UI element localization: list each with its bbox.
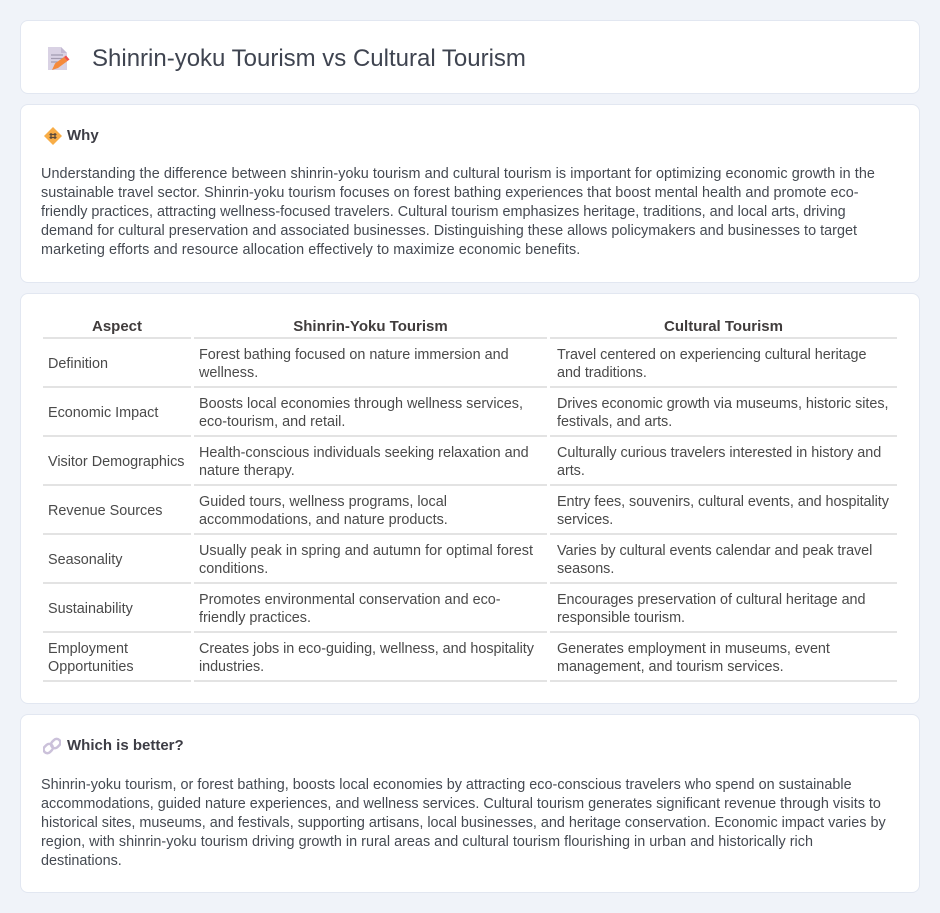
cell: shinrin-yoku sustainability [199,592,501,626]
table header: aspect: Aspect [92,318,142,335]
cell: cultural seasonality [557,543,872,577]
text: why paragraph: Understanding the difference between shinrin-yoku tourism and cultural tourism is important for optimizing economic growth in the [41,166,875,182]
text: which is better paragraph: Shinrin-yoku tourism, or forest bathing, boosts local economies by attracting eco-conscious travelers who spend on sustainable [41,777,852,793]
table header: cultural tourism [550,317,897,339]
table header: aspect [43,317,191,339]
table header: shinrin-yoku tourism: Shinrin-Yoku Tourism [293,318,448,335]
cell: cultural revenue: Entry fees, souvenirs, cultural events, and hospitality [557,494,889,510]
cell: cultural demographics: Culturally curious travelers interested in history and [557,445,881,461]
cell: cultural definition: Travel centered on experiencing cultural heritage [557,347,866,363]
cell: shinrin-yoku revenue [199,494,448,528]
icon: memo with pencil [48,47,70,70]
row label: revenue sources: Revenue Sources [48,503,162,519]
cell: cultural employment: Generates employment in museums, event [557,641,830,657]
cell: cultural revenue [557,494,889,528]
cell: cultural employment [557,641,830,675]
cell: shinrin-yoku sustainability: friendly practices. [199,610,311,626]
row label: seasonality: Seasonality [48,552,122,568]
row label: visitor demographics: Visitor Demographics [48,454,185,470]
cell: shinrin-yoku revenue: accommodations, and nature products. [199,512,448,528]
cell: shinrin-yoku definition: Forest bathing focused on nature immersion and [199,347,509,363]
cell: shinrin-yoku demographics: Health-conscious individuals seeking relaxation and [199,445,529,461]
cell: shinrin-yoku economic impact: Boosts local economies through wellness services, [199,396,523,412]
cell: cultural economic impact: festivals, and arts. [557,414,672,430]
cell: shinrin-yoku seasonality: conditions. [199,561,268,577]
table header: shinrin-yoku tourism [194,317,547,339]
cell: cultural demographics: arts. [557,463,585,479]
text: which is better paragraph: accommodations, guided nature experiences, and wellness services. Cultural tourism generates significant revenue through visits to [41,796,881,812]
table header: cultural tourism: Cultural Tourism [664,318,783,335]
cell: cultural sustainability: Encourages preservation of cultural heritage and [557,592,865,608]
row label: employment opportunities [48,641,134,675]
text: why paragraph: friendly practices, attracting wellness-focused travelers. Cultural tourism emphasizes heritage, traditions, and local arts, driving [41,204,846,220]
cell: cultural definition: and traditions. [557,365,647,381]
cell: shinrin-yoku employment: Creates jobs in eco-guiding, wellness, and hospitality [199,641,534,657]
cell: shinrin-yoku economic impact [199,396,523,430]
cell: cultural revenue: services. [557,512,613,528]
row label: definition: Definition [48,356,108,372]
cell: shinrin-yoku demographics [199,445,529,479]
row label: employment opportunities: Employment [48,641,128,657]
panel: title header [20,20,920,94]
cell: cultural sustainability [557,592,865,626]
cell: shinrin-yoku definition: wellness. [199,365,258,381]
cell: cultural employment: management, and tourism services. [557,659,784,675]
cell: cultural demographics [557,445,881,479]
title: Shinrin-yoku Tourism vs Cultural Tourism [92,45,526,72]
text: which is better paragraph [41,777,886,869]
text: which is better paragraph: destinations. [41,853,122,869]
icon: warning diamond [44,127,62,145]
icon: link [43,738,61,754]
cell: shinrin-yoku seasonality: Usually peak in spring and autumn for optimal forest [199,543,533,559]
cell: shinrin-yoku seasonality [199,543,533,577]
cell: cultural definition [557,347,866,381]
panel: comparison table [20,293,920,704]
cell: shinrin-yoku revenue: Guided tours, wellness programs, local [199,494,447,510]
row label: sustainability: Sustainability [48,601,133,617]
text: which is better paragraph: region, with shinrin-yoku tourism driving growth in rural areas and cultural tourism flourishing in urban and historically rich [41,834,813,850]
cell: cultural economic impact: Drives economic growth via museums, historic sites, [557,396,888,412]
cell: shinrin-yoku definition [199,347,509,381]
text: why paragraph: marketing efforts and resource allocation effectively to maximize economic benefits. [41,242,580,258]
cell: shinrin-yoku employment [199,641,534,675]
cell: shinrin-yoku employment: industries. [199,659,264,675]
panel: why [20,104,920,283]
heading: which is better: Which is better? [67,737,184,754]
cell: shinrin-yoku demographics: nature therapy. [199,463,295,479]
cell: cultural seasonality: seasons. [557,561,614,577]
cell: shinrin-yoku economic impact: eco-tourism, and retail. [199,414,345,430]
row label: economic impact: Economic Impact [48,405,158,421]
heading: why: Why [67,127,99,144]
panel: which is better [20,714,920,893]
cell: cultural seasonality: Varies by cultural events calendar and peak travel [557,543,872,559]
cell: shinrin-yoku sustainability: Promotes environmental conservation and eco- [199,592,501,608]
cell: cultural sustainability: responsible tourism. [557,610,685,626]
text: why paragraph: sustainable travel sector. Shinrin-yoku tourism focuses on forest bathing experiences that boost mental health and promote eco- [41,185,859,201]
text: which is better paragraph: historical sites, museums, and festivals, supporting artisans, local businesses, and heritage conservation. Economic impact varies by [41,815,886,831]
row label: employment opportunities: Opportunities [48,659,134,675]
cell: cultural economic impact [557,396,888,430]
text: why paragraph [41,166,875,258]
text: why paragraph: demand for cultural preservation and associated businesses. Distinguishing these allows policymakers and businesses to target [41,223,857,239]
